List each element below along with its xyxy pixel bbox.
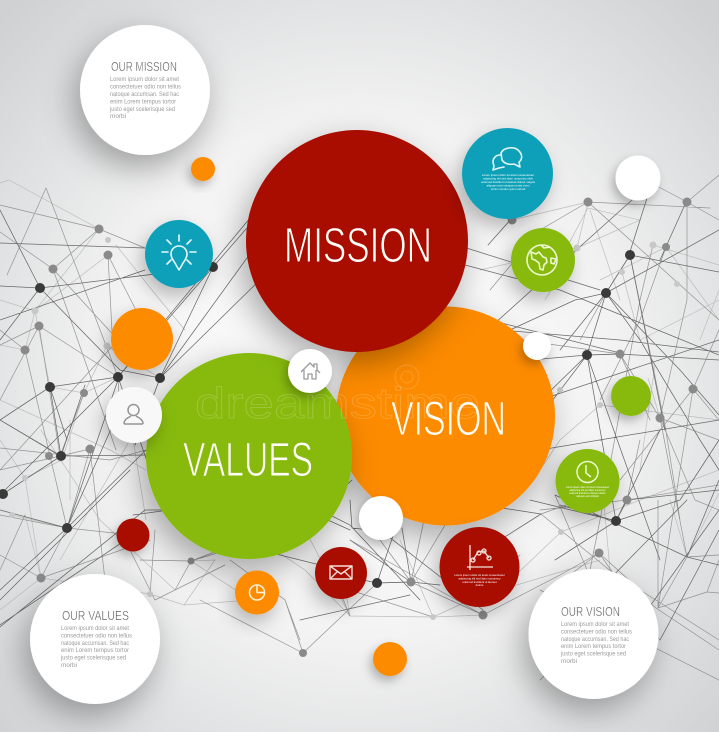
icon: clock bbox=[577, 462, 598, 482]
dot: white bottom centre bbox=[359, 496, 403, 540]
watermark bbox=[195, 365, 480, 428]
text block: mission body: natoque accumsan. Sed hac bbox=[110, 91, 180, 98]
circle: home icon bbox=[288, 349, 332, 393]
icon: line chart bbox=[467, 545, 493, 570]
text block: vision body: consectetuer odio non tellus bbox=[561, 628, 633, 636]
circle: mail icon red bbox=[315, 547, 367, 599]
text block: mission body: enim Lorem tempus tortor bbox=[110, 98, 177, 106]
text block: mission body: consectetuer odio non tellus bbox=[110, 84, 182, 90]
heading: mission: MISSION bbox=[284, 219, 432, 273]
dot: green right bbox=[611, 376, 651, 416]
heading: our mission: OUR MISSION bbox=[111, 60, 177, 74]
heading: vision: VISION bbox=[391, 393, 506, 446]
text block: red body: dolore bbox=[476, 583, 484, 587]
text block: vision body: Lorem ipsum dolor sit amet bbox=[561, 621, 629, 628]
circle: clock icon green bbox=[556, 449, 620, 513]
icon: light bulb bbox=[162, 235, 196, 270]
icon: speech bubbles bbox=[493, 148, 522, 170]
text block: teal body: euismod tincidunt ut laoreet dolore magna bbox=[481, 180, 535, 184]
dot: orange left bbox=[111, 308, 173, 370]
text block: teal body: Lorem ipsum dolor sit amet consectetuer bbox=[482, 173, 534, 177]
dot: orange bottom bbox=[373, 642, 407, 676]
circle: chart icon red bbox=[440, 527, 520, 607]
circle: chat icon teal bbox=[462, 128, 553, 219]
text block: vision body: justo eget scelerisque sed bbox=[560, 650, 626, 658]
circle: our values bbox=[30, 574, 160, 704]
circle: values bbox=[146, 353, 352, 559]
icon: pie chart bbox=[250, 585, 264, 600]
text block: mission body: morbi bbox=[110, 113, 127, 120]
text block: mission body: justo eget scelerisque sed bbox=[109, 106, 175, 113]
dot: small white bbox=[523, 332, 551, 360]
text block: values body: natoque accumsan. Sed hac bbox=[61, 640, 130, 647]
text block: teal body: minim veniam quis nostrud bbox=[491, 187, 526, 191]
icon: envelope bbox=[330, 566, 352, 579]
text block: vision body: enim Lorem tempus tortor bbox=[561, 643, 627, 650]
text block: green body: euismod tincidunt ut laoreet dolore bbox=[569, 492, 606, 495]
dot: white top right bbox=[616, 156, 660, 200]
circle: our vision bbox=[528, 569, 658, 699]
text block: teal body: aliquam erat volutpat ut wisi enim bbox=[487, 184, 530, 188]
text block: red body: adipiscing elit sed diam nonummy bbox=[459, 576, 501, 580]
icon: person bbox=[124, 404, 143, 424]
text block: values body: enim Lorem tempus tortor bbox=[61, 647, 130, 654]
text block: red body: Lorem ipsum dolor sit amet consectetuer bbox=[454, 573, 505, 577]
text block: vision body: morbi bbox=[561, 658, 578, 665]
text block: values body: consectetuer odio non tellus bbox=[61, 632, 133, 640]
circle: bulb icon teal bbox=[145, 220, 213, 288]
text block: values body: morbi bbox=[61, 662, 78, 669]
text block: green body: adipiscing elit sed diam nonummy bbox=[570, 489, 606, 492]
circle: person icon bbox=[106, 387, 162, 443]
heading: our vision: OUR VISION bbox=[561, 605, 620, 619]
text block: green body: aliquam erat volutpat bbox=[576, 495, 599, 498]
network mesh bbox=[0, 175, 719, 680]
circle: our mission bbox=[80, 25, 210, 155]
circle: mission bbox=[246, 130, 468, 352]
icon: globe bbox=[527, 245, 557, 275]
text block: values body: Lorem ipsum dolor sit amet bbox=[61, 625, 129, 632]
dot: dark red bbox=[116, 518, 150, 552]
circle: pie icon orange bbox=[235, 570, 279, 614]
text block: vision body: natoque accumsan. Sed hac bbox=[561, 636, 630, 643]
dot: small orange top bbox=[191, 157, 215, 181]
text block: values body: justo eget scelerisque sed bbox=[60, 654, 126, 662]
icon: house bbox=[301, 363, 320, 379]
text block: green body: Lorem ipsum dolor sit amet consectetuer bbox=[566, 486, 609, 489]
watermark: dreamstime bbox=[195, 379, 480, 428]
circle: vision bbox=[336, 306, 555, 526]
circle: globe icon green bbox=[511, 228, 575, 292]
text block: mission body: Lorem ipsum dolor sit amet bbox=[110, 76, 179, 83]
network nodes bbox=[0, 198, 698, 657]
text block: red body: euismod tincidunt ut laoreet bbox=[462, 580, 497, 584]
text block: teal body: adipiscing elit sed diam nonummy nibh bbox=[483, 176, 533, 180]
heading: values: VALUES bbox=[183, 434, 313, 487]
heading: our values: OUR VALUES bbox=[62, 609, 129, 623]
